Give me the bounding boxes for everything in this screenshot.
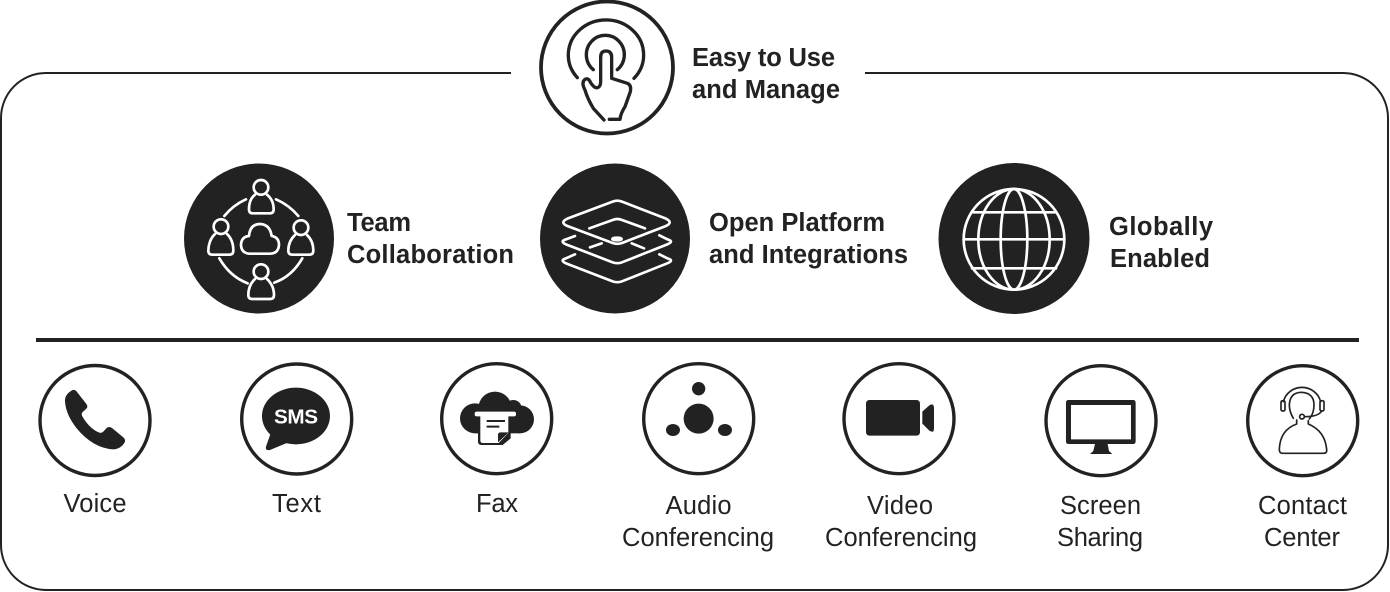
channel: text (242, 364, 352, 518)
icon: sms bubble: SMS (274, 405, 318, 428)
panel: easy to use and manage (541, 2, 840, 134)
label: audio conferencing (622, 492, 774, 552)
heading: open platform and integrations: Open Platform (709, 209, 885, 237)
label: audio conferencing: Audio (666, 492, 732, 520)
label: video conferencing: Video (867, 492, 933, 520)
panel: globally enabled (938, 163, 1214, 314)
channel: audio conferencing (622, 364, 774, 552)
heading: easy to use and manage: Easy to Use (692, 44, 835, 72)
label: voice: Voice (64, 490, 126, 518)
channel: contact center (1248, 366, 1358, 552)
icon: team around cloud (184, 164, 334, 314)
label: contact center: Center (1264, 524, 1340, 552)
icon: globe (938, 163, 1090, 314)
label: screen sharing: Screen (1060, 492, 1141, 520)
channel: fax (442, 364, 552, 518)
heading: team collaboration (347, 209, 514, 269)
heading: globally enabled: Globally (1109, 213, 1214, 241)
heading: globally enabled: Enabled (1110, 245, 1210, 273)
label: fax: Fax (476, 490, 518, 518)
icon: phone handset (40, 366, 150, 476)
heading: open platform and integrations (709, 209, 908, 269)
channel: screen sharing (1046, 366, 1156, 552)
label: audio conferencing: Conferencing (622, 524, 774, 552)
label: screen sharing (1057, 492, 1143, 552)
heading: open platform and integrations: and Integrations (709, 241, 908, 269)
channel: voice (40, 366, 150, 518)
icon: headset agent (1248, 366, 1358, 476)
label: video conferencing (825, 492, 977, 552)
channel: video conferencing (825, 364, 977, 552)
heading: easy to use and manage (692, 44, 840, 104)
icon: touch hand (541, 2, 673, 134)
label: screen sharing: Sharing (1057, 524, 1143, 552)
label: contact center (1258, 492, 1347, 552)
icon: three dots (644, 364, 754, 474)
label: text: Text (272, 490, 321, 518)
heading: team collaboration: Team (347, 209, 411, 237)
heading: easy to use and manage: and Manage (692, 76, 840, 104)
icon: video camera (844, 364, 954, 474)
panel: team collaboration (184, 164, 514, 314)
icon: sms bubble (242, 364, 352, 474)
icon: stacked layers (540, 164, 690, 314)
label: contact center: Contact (1258, 492, 1347, 520)
icon: monitor (1046, 366, 1156, 476)
heading: globally enabled (1109, 213, 1214, 273)
panel: open platform and integrations (540, 164, 908, 314)
label: video conferencing: Conferencing (825, 524, 977, 552)
divider (36, 338, 1359, 342)
heading: team collaboration: Collaboration (347, 241, 514, 269)
icon: cloud fax (442, 364, 552, 474)
